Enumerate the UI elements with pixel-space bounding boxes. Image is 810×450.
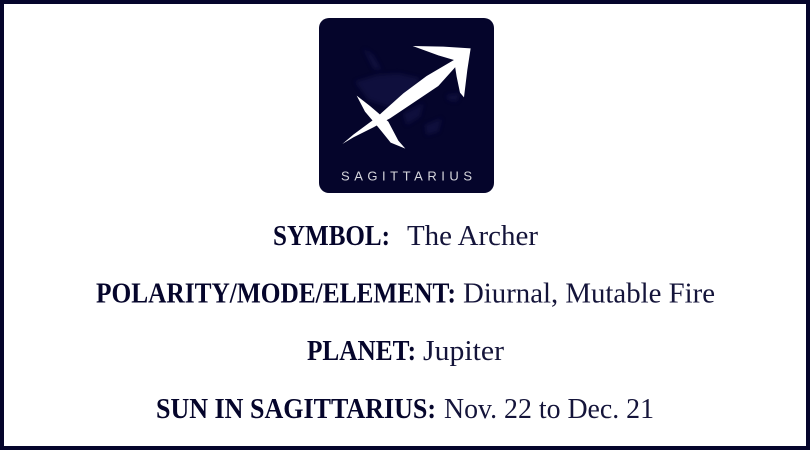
text: sun dates: SUN IN SAGITTARIUS: — [156, 394, 436, 425]
text: polarity, mode and element: POLARITY/MODE/ELEMENT: — [96, 278, 456, 310]
icon: paint splatter — [355, 48, 460, 135]
text: sun dates: Nov. 22 to Dec. 21 — [444, 394, 654, 425]
text: planet: PLANET: — [307, 336, 416, 367]
text: planet: Jupiter — [423, 336, 505, 367]
text: sun dates — [156, 394, 654, 425]
card label: SAGITTARIUS — [341, 168, 472, 184]
text: symbol: SYMBOL: — [273, 221, 390, 252]
icon: Sagittarius card — [319, 18, 494, 193]
icon: Sagittarius arrow — [342, 46, 471, 149]
text: planet — [307, 336, 505, 367]
text: polarity, mode and element — [96, 278, 715, 310]
text: symbol: The Archer — [407, 221, 539, 252]
text: symbol — [273, 221, 539, 252]
text: polarity, mode and element: Diurnal, Mutable Fire — [463, 278, 715, 310]
